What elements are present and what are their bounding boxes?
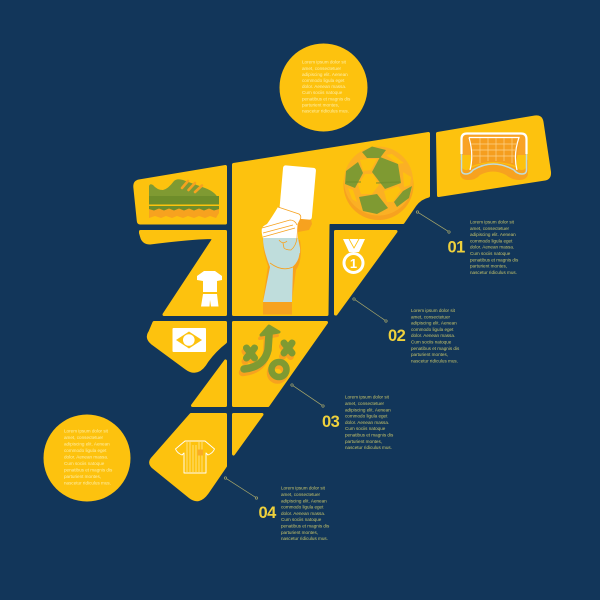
text block 03: nascetur ridiculus mus. bbox=[345, 445, 392, 450]
text block 02: Lorem ipsum dolor sit bbox=[411, 308, 456, 313]
circle callout: bottom left: nascetur ridiculus mus. bbox=[64, 481, 111, 486]
text block 03: amet, consectetuer bbox=[345, 401, 385, 406]
text block 02: parturient montes, bbox=[411, 352, 448, 357]
text block 02: amet, consectetuer bbox=[411, 314, 451, 319]
circle callout: bottom left: dolor. Aenean massa. bbox=[64, 455, 108, 460]
text block 01: commodo ligula eget bbox=[470, 238, 513, 243]
leader line 04 bbox=[224, 477, 258, 499]
text block 02: commodo ligula eget bbox=[411, 327, 454, 332]
text block 02: dolor. Aenean massa. bbox=[411, 333, 455, 338]
icon: referee shirt bbox=[176, 441, 214, 473]
icon: goal bbox=[460, 134, 528, 180]
arm shadow bbox=[263, 235, 301, 300]
circle callout: top: Lorem ipsum dolor sit bbox=[302, 60, 347, 65]
circle callout: bottom left: adipiscing elit. Aenean bbox=[64, 442, 110, 447]
circle callout: bottom left: penatibus et magnis dis bbox=[64, 468, 113, 473]
number 04: 04 bbox=[258, 504, 277, 522]
text block 02: penatibus et magnis dis bbox=[411, 346, 460, 351]
text block 01: amet, consectetuer bbox=[470, 226, 510, 231]
circle callout: top: adipiscing elit. Aenean bbox=[302, 72, 348, 77]
circle callout: top bbox=[280, 44, 368, 132]
text block 04: dolor. Aenean massa. bbox=[281, 511, 325, 516]
circle callout: top: dolor. Aenean massa. bbox=[302, 84, 346, 89]
panel: small triangle left bbox=[192, 361, 226, 406]
icon: boot bbox=[149, 179, 219, 218]
circle callout: top: commodo ligula eget bbox=[302, 78, 345, 83]
circle callout: bottom left: Cum sociis natoque bbox=[64, 461, 105, 466]
circle callout: bottom left: parturient montes, bbox=[64, 474, 101, 479]
leader line 03 bbox=[291, 384, 324, 407]
text block 01: Cum sociis natoque bbox=[470, 251, 511, 256]
text block 02: Cum sociis natoque bbox=[411, 340, 452, 344]
text block 04: adipiscing elit. Aenean bbox=[281, 498, 327, 503]
text block 03: Cum sociis natoque bbox=[345, 426, 386, 431]
text block 03: commodo ligula eget bbox=[345, 414, 388, 419]
text block 01: parturient montes, bbox=[470, 264, 507, 269]
panel: boot bbox=[135, 166, 226, 223]
text block 03: penatibus et magnis dis bbox=[345, 432, 394, 438]
text block 03: Lorem ipsum dolor sit bbox=[345, 395, 390, 400]
text block 01: penatibus et magnis dis bbox=[470, 257, 519, 262]
number 03: 03 bbox=[322, 413, 340, 431]
icon: jersey and shorts bbox=[197, 271, 222, 306]
circle callout: top: parturient montes, bbox=[302, 102, 339, 107]
icon: medal bbox=[343, 239, 365, 272]
panel: medal bbox=[336, 232, 396, 314]
text block 03: parturient montes, bbox=[345, 439, 382, 444]
panel: shirt shape bbox=[140, 232, 226, 314]
panel: center with card and ball bbox=[234, 134, 428, 314]
panel: tactics bbox=[234, 322, 326, 406]
yellow patches bbox=[348, 154, 411, 202]
icon: flag of Brazil bbox=[172, 328, 206, 352]
green patches bbox=[345, 146, 412, 214]
icon: medal: 1 bbox=[350, 256, 357, 271]
text block 02: nascetur ridiculus mus. bbox=[411, 358, 458, 363]
text block 03: dolor. Aenean massa. bbox=[345, 420, 389, 425]
text block 04: Cum sociis natoque bbox=[281, 517, 322, 522]
leader line 01 bbox=[416, 211, 450, 233]
circle callout: top: Cum sociis natoque bbox=[302, 90, 343, 95]
panel: flag bbox=[148, 322, 226, 371]
text block 04: amet, consectetuer bbox=[281, 492, 321, 497]
icon: soccer ball bbox=[344, 146, 414, 220]
text block 04: Lorem ipsum dolor sit bbox=[281, 486, 326, 491]
circle callout: top: nascetur ridiculus mus. bbox=[302, 108, 349, 114]
fist and arm bbox=[263, 238, 300, 302]
ball shadow bbox=[344, 150, 414, 220]
text block 01: Lorem ipsum dolor sit bbox=[470, 220, 515, 224]
panel: goal bbox=[438, 117, 550, 196]
panel: small triangle right bbox=[234, 414, 262, 454]
sleeve bbox=[263, 302, 292, 314]
text block 01: nascetur ridiculus mus. bbox=[470, 270, 517, 275]
leader line 02 bbox=[353, 298, 387, 322]
finger outlines bbox=[262, 207, 301, 269]
text block 03: adipiscing elit. Aenean bbox=[345, 407, 391, 412]
number 01: 01 bbox=[448, 238, 465, 256]
icon: tactics board bbox=[242, 326, 292, 380]
circle callout: bottom left: amet, consectetuer bbox=[64, 435, 104, 440]
circle callout: bottom left bbox=[44, 414, 130, 502]
card bbox=[279, 165, 316, 220]
panel: referee shirt bbox=[151, 414, 226, 500]
circle callout: top: penatibus et magnis dis bbox=[302, 96, 351, 101]
text block 04: nascetur ridiculus mus. bbox=[281, 536, 328, 541]
text block 02: adipiscing elit. Aenean bbox=[411, 321, 457, 326]
card shadow bbox=[296, 215, 312, 232]
circle callout: bottom left: Lorem ipsum dolor sit bbox=[64, 429, 109, 434]
icon: referee hand holding card bbox=[262, 165, 316, 314]
text block 04: commodo ligula eget bbox=[281, 505, 324, 510]
text block 04: parturient montes, bbox=[281, 530, 318, 535]
number 02: 02 bbox=[388, 327, 406, 345]
circle callout: bottom left: commodo ligula eget bbox=[64, 448, 107, 453]
text block 04: penatibus et magnis dis bbox=[281, 524, 330, 528]
text block 01: adipiscing elit. Aenean bbox=[470, 232, 516, 237]
circle callout: top: amet, consectetuer bbox=[302, 66, 342, 71]
text block 01: dolor. Aenean massa. bbox=[470, 245, 514, 250]
